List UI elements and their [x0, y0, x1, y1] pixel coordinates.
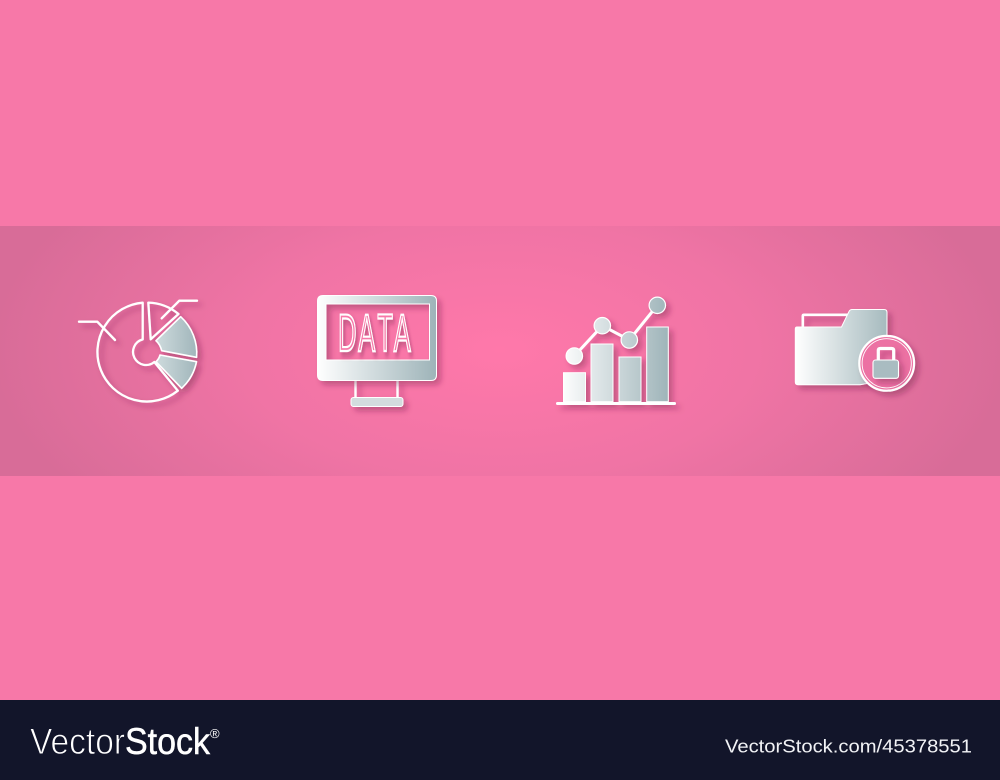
left callout line: [79, 322, 115, 340]
lock badge ring: [859, 336, 914, 391]
outlined top wedge: [148, 303, 178, 339]
trend line: [574, 305, 657, 356]
filled lower right wedge: [156, 355, 196, 388]
footer bar: [0, 700, 1000, 780]
right callout line: [162, 301, 197, 318]
logo light word: Vector: [30, 721, 125, 762]
image id: VectorStock.com/45378551: [725, 736, 972, 756]
trend points: [566, 297, 666, 364]
monitor stand: [351, 380, 403, 406]
folder back tab: [803, 315, 848, 327]
bars: [564, 327, 668, 402]
central darker band: [0, 226, 1000, 476]
monitor frame: [318, 296, 436, 380]
baseline: [556, 402, 676, 405]
VectorStock logo: [30, 721, 220, 762]
icon: data monitor: [318, 296, 436, 406]
icon: locked folder: [795, 310, 914, 391]
icon: bar and line chart: [556, 297, 676, 405]
pie outline: [97, 303, 178, 402]
icon: pie chart: [79, 301, 197, 402]
inner disc ring: [862, 339, 911, 388]
registered mark: ®: [210, 726, 220, 741]
folder body: [795, 310, 887, 385]
DATA label: DATA: [338, 303, 411, 362]
padlock: [873, 348, 898, 378]
filled upper right wedge: [156, 317, 197, 357]
logo bold word: Stock: [125, 721, 210, 762]
